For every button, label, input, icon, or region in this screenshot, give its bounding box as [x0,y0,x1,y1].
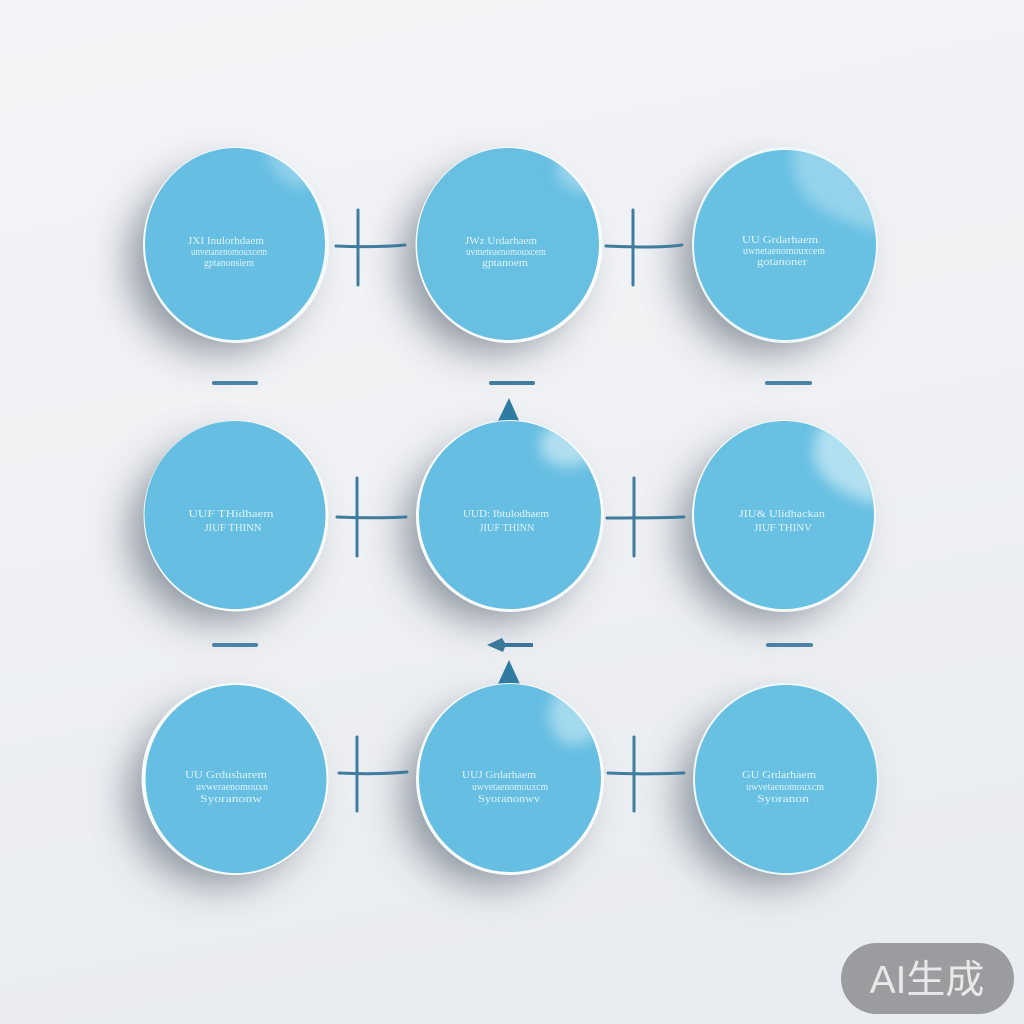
disc 9 [693,683,879,875]
disc 9 text: uwvetaenomouxcm [746,782,824,793]
disc 6 text: JIU& Ulidhackan [739,509,825,520]
disc 8 [416,683,604,875]
disc 2 [416,147,613,343]
disc 7 text: UU Grdusharem [185,770,267,781]
disc 9 text: GU Grdarhaem [742,770,816,781]
disc 9 text [742,770,824,805]
dash: upper middle [489,381,535,385]
disc 8 text: uwvetaenomouxcm [472,782,548,793]
disc 8 text [462,770,548,805]
badge: AI generated: AI生成 [870,959,984,1002]
disc 8 text: Syoranonwv [478,794,540,805]
disc 9 text: Syoranon [757,794,809,805]
disc 2 text [465,236,546,269]
disc 6 text [739,509,825,534]
disc 2 text: uvmeteaenomouxcem [466,247,546,258]
dash: upper left [212,381,258,385]
disc 3 text: uwnetaenomouxcem [743,246,825,257]
disc 5 text: JIUF THINN [480,523,534,534]
disc 7 text: Syoranonw [200,794,263,805]
dash: upper right [765,381,812,385]
disc 4 text [188,509,274,534]
disc 3 text [742,235,825,268]
disc 5 text: UUD: Ibtulodhaem [463,509,549,520]
disc 8 text: UUJ Grdarhaem [462,770,536,781]
disc 3 [692,140,885,343]
disc 2 text: gptanoem [482,258,528,269]
disc 4 [144,420,328,612]
dash: lower right [766,643,813,647]
disc 1 text: JXI Inulorhdaem [188,236,264,247]
disc 7 text [185,770,268,805]
disc 1 text: unvetanenomouxcem [191,247,267,258]
connector: row 3 plus 2 [608,737,684,811]
disc shadows [129,172,856,884]
dash: lower left [212,643,258,647]
connector: row 1 plus 2 [606,210,682,285]
disc 5 text [463,509,549,534]
disc 4 text: UUF THidhaem [188,509,274,520]
connector: row 2 plus 2 [607,478,684,556]
disc 7 [142,683,328,875]
disc 3 text: UU Grdarhaem [742,235,818,246]
disc 7 text: uvweraenomouxn [196,782,268,793]
disc 6 text: JIUF THINV [754,523,813,534]
badge: AI generated [841,943,1014,1014]
disc 1 [143,141,329,343]
disc 2 text: JWz Urdarhaem [465,236,537,247]
connector: row 1 plus 1 [336,210,405,285]
disc 5 [416,420,604,612]
arrow: up into middle disc [497,398,520,423]
disc 6 [692,420,880,612]
connector: row 3 plus 1 [339,737,407,811]
disc 4 text: JIUF THINN [204,523,262,534]
arrow: lower middle pointing left [487,638,533,652]
connector: row 2 plus 1 [337,478,406,556]
disc 1 text [188,236,267,269]
disc 3 text: gotanoner [757,257,808,268]
disc 1 text: gptanonsiem [204,258,254,269]
arrow: up into bottom middle disc [498,660,520,684]
